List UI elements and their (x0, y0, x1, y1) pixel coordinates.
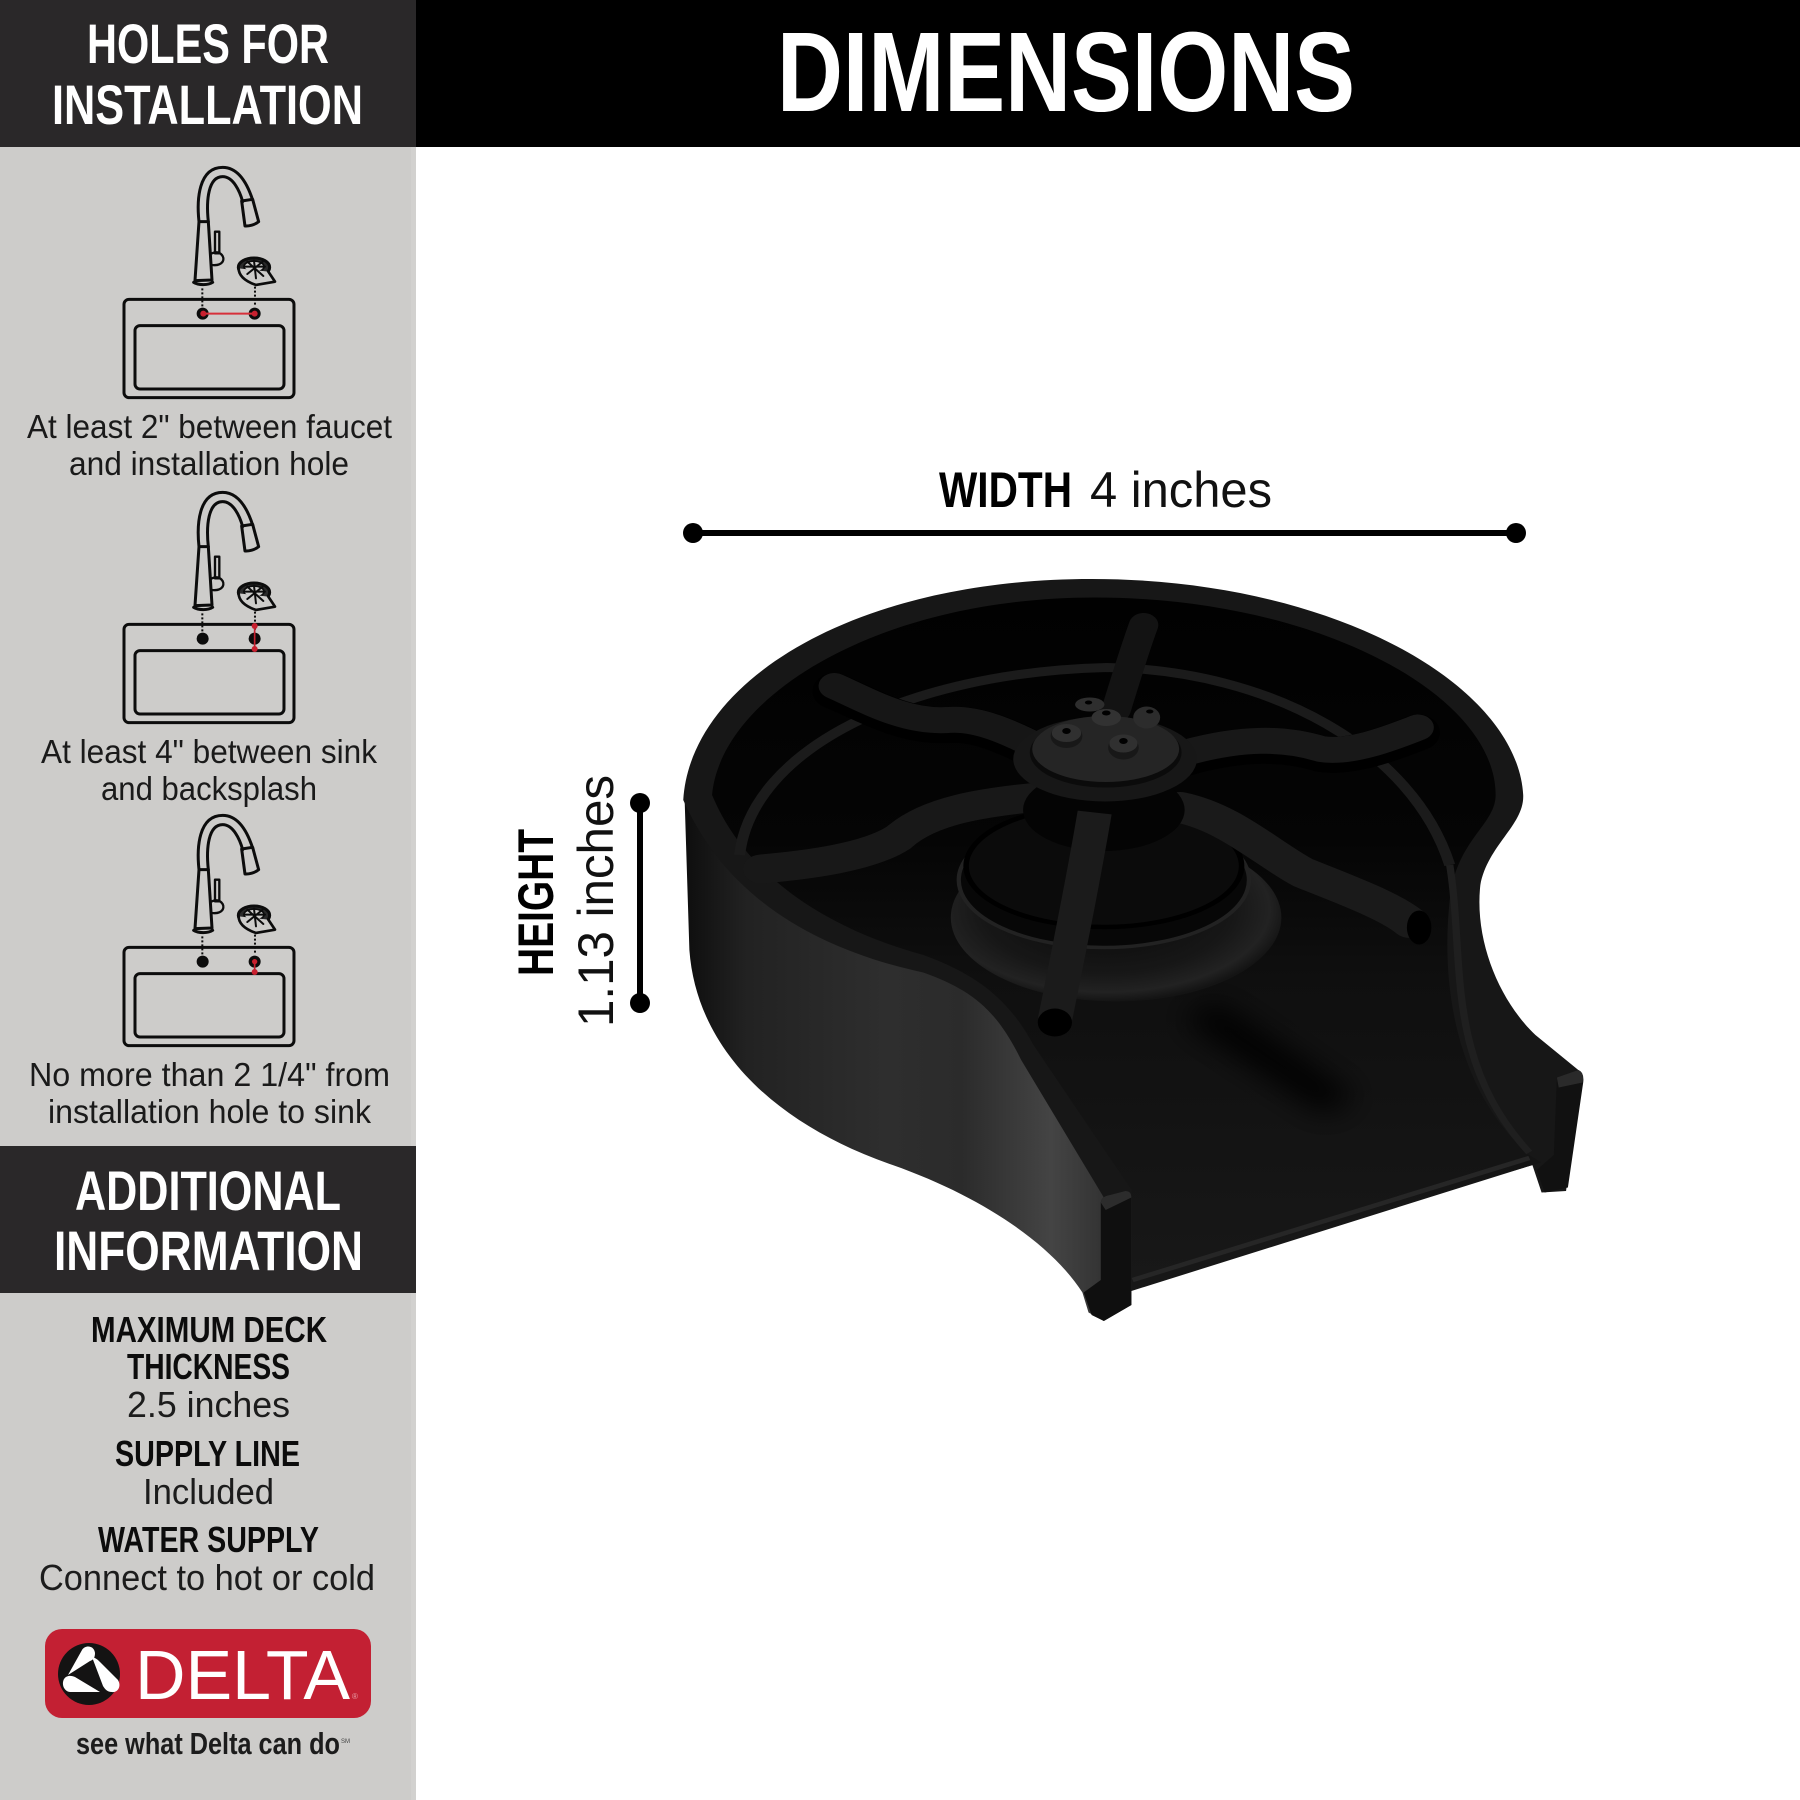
text: water supply: Connect to hot or cold (39, 1557, 375, 1598)
logo: delta (45, 1629, 371, 1718)
right end tab (1537, 1070, 1583, 1192)
text: backsplash spacing (41, 734, 377, 808)
heading: holes for installation: INSTALLATION (52, 73, 363, 136)
title band: dimensions: DIMENSIONS (777, 9, 1355, 135)
heading: additional information: ADDITIONAL (75, 1159, 341, 1222)
text: faucet spacing: and installation hole (69, 446, 349, 483)
icon: faucet spacing diagram (124, 167, 294, 398)
text: supply line: SUPPLY LINE (115, 1433, 300, 1474)
front arm (1038, 812, 1095, 1036)
centre dome (951, 805, 1281, 1002)
width dimension line (683, 523, 1526, 543)
heading: additional information: INFORMATION (54, 1219, 363, 1282)
rim (683, 579, 1581, 1291)
icon: sink distance diagram (124, 815, 294, 1046)
text: maximum deck thickness: 2.5 inches (127, 1384, 290, 1425)
width label: WIDTH (939, 462, 1072, 518)
inner ridge (740, 668, 1450, 865)
text: faucet spacing: At least 2" between faucet (27, 409, 393, 446)
logo: delta: ® (352, 1692, 358, 1701)
spray arms (761, 625, 1418, 922)
heading: additional information (0, 1146, 416, 1293)
width label (939, 462, 1272, 518)
text: supply line (115, 1433, 300, 1512)
left end tab (1084, 1191, 1131, 1321)
text: maximum deck thickness (91, 1309, 327, 1425)
floor shadow (1199, 1010, 1340, 1105)
arm end opening (1407, 910, 1431, 944)
height label (508, 775, 624, 1027)
hub (1013, 698, 1197, 851)
text: water supply: WATER SUPPLY (98, 1519, 319, 1560)
text: maximum deck thickness: THICKNESS (127, 1346, 290, 1387)
tagline: SM (341, 1739, 350, 1745)
width label: 4 inches (1090, 462, 1272, 518)
text: sink distance: installation hole to sink (48, 1094, 371, 1131)
height label: HEIGHT (508, 829, 564, 976)
logo: delta: DELTA (135, 1636, 350, 1714)
outer wall (684, 795, 1131, 1321)
text: backsplash spacing: At least 4" between sink (41, 734, 377, 771)
text: faucet spacing (27, 409, 393, 483)
icon: backsplash spacing diagram (124, 492, 294, 723)
text: sink distance: No more than 2 1/4" from (29, 1057, 390, 1094)
product: glass rinser (683, 579, 1583, 1321)
text: supply line: Included (143, 1471, 274, 1512)
heading: holes for installation: HOLES FOR (87, 12, 329, 75)
tagline: see what Delta can do (76, 1726, 340, 1761)
title band: dimensions (416, 0, 1800, 147)
height label: 1.13 inches (568, 775, 624, 1027)
height dimension line (630, 793, 650, 1013)
ramp lip (1133, 1158, 1529, 1280)
panel: left sidebar (0, 0, 416, 1800)
heading: holes for installation (0, 0, 416, 147)
bowl interior (712, 598, 1542, 1282)
text: backsplash spacing: and backsplash (101, 771, 317, 808)
text: water supply (39, 1519, 375, 1598)
text: maximum deck thickness: MAXIMUM DECK (91, 1309, 327, 1350)
text: sink distance (29, 1057, 390, 1131)
